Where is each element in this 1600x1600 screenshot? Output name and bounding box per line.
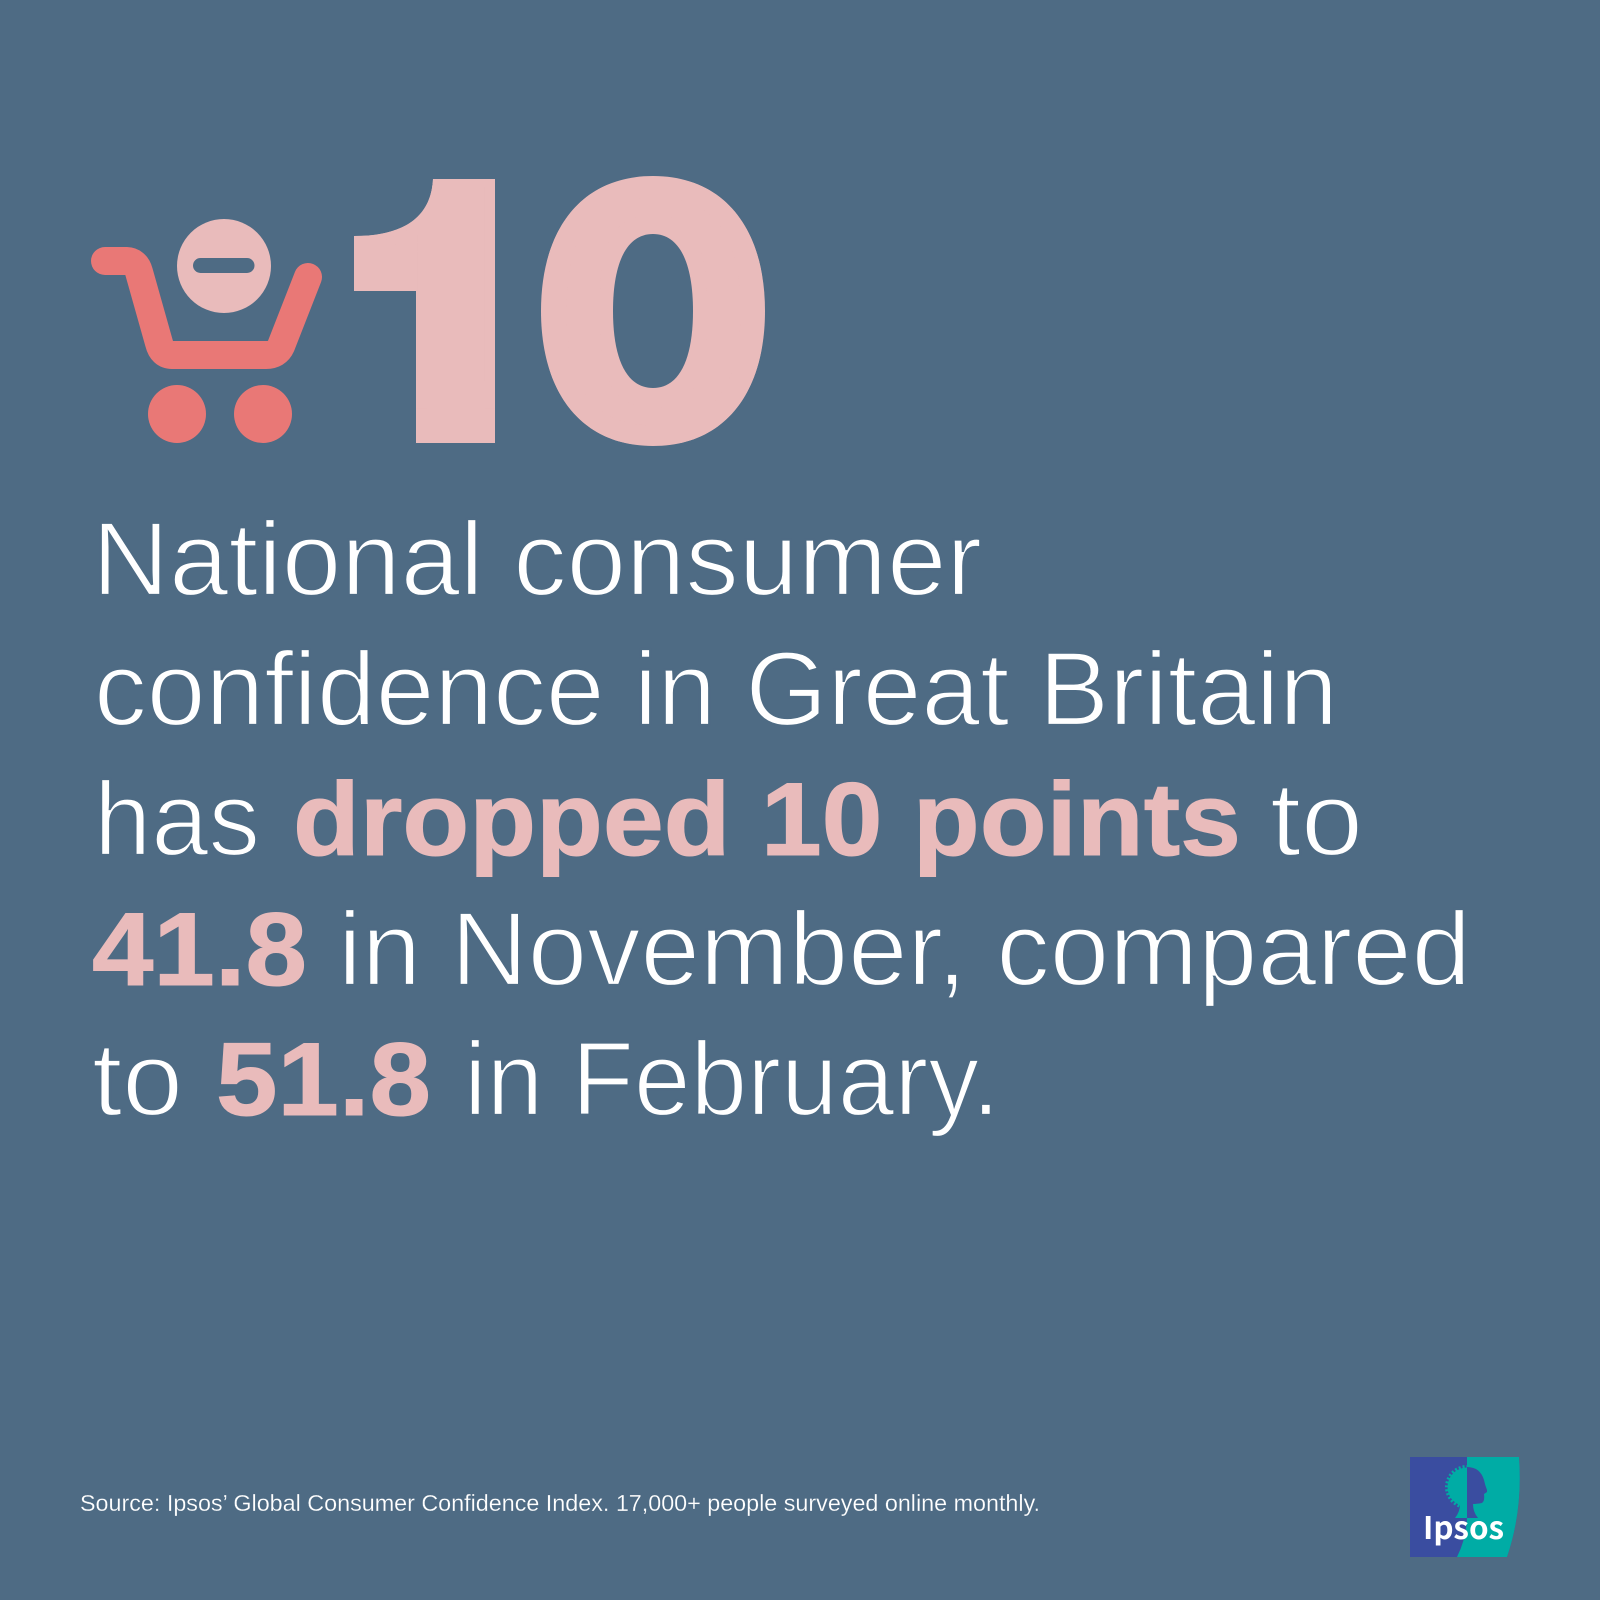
logo: Ipsos (1410, 1457, 1520, 1557)
main statement text: has (94, 761, 260, 878)
main statement text (92, 501, 1471, 1138)
icon: shopping cart with minus (105, 219, 308, 443)
main statement text: in November, compared (338, 891, 1471, 1008)
main statement text: National consumer (92, 501, 982, 618)
big number 10: 0 (538, 116, 770, 507)
source note: Source: Ipsos’ Global Consumer Confidence Index. 17,000+ people surveyed online monthly. (80, 1490, 1040, 1516)
main statement text: confidence in Great Britain (94, 631, 1338, 748)
logo: Ipsos: Ipsos (1423, 1503, 1504, 1548)
main statement text: 51.8 (216, 1022, 431, 1138)
big number 10: 1 (308, 102, 581, 524)
main statement text: to (92, 1021, 183, 1138)
big number 10 (354, 176, 765, 446)
main statement text: in February. (464, 1021, 1000, 1138)
main statement text: to (1270, 761, 1363, 878)
main statement text: 41.8 (92, 892, 307, 1008)
main statement text: dropped 10 points (293, 762, 1241, 878)
